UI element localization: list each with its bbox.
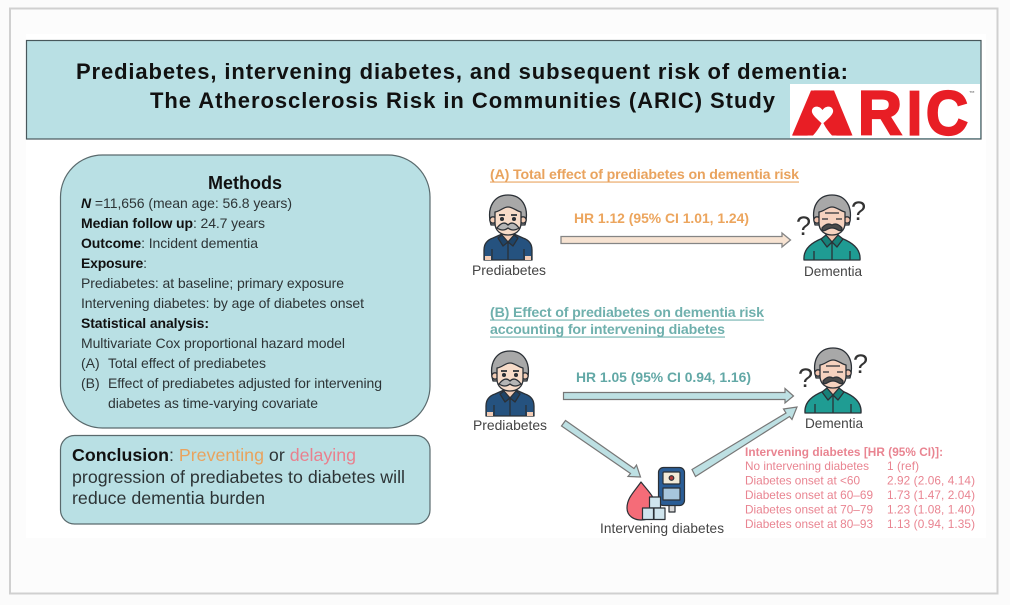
table: hazard ratios by age of diabetes onset: 1 (ref): [887, 459, 919, 473]
table: hazard ratios by age of diabetes onset: Intervening diabetes [HR (95% CI)]:: [745, 445, 943, 459]
heading: methods: Methods: [208, 173, 282, 193]
arrow: prediabetes to dementia: [564, 388, 794, 403]
text block: conclusion: progression of prediabetes to diabetes will: [72, 467, 405, 487]
text block: methods details: Outcome: Incident dementia: [81, 235, 258, 251]
question marks: [796, 196, 866, 241]
logo: ARIC: A: [793, 80, 851, 148]
text block: methods details: [81, 195, 382, 411]
question marks: ?: [853, 349, 868, 379]
title: [76, 59, 848, 113]
title: Prediabetes, intervening diabetes, and subsequent risk of dementia:: [76, 59, 848, 84]
panel: methods: [60, 155, 430, 428]
question marks: ?: [851, 196, 866, 226]
question marks: ?: [798, 363, 813, 393]
hazard ratio A: HR 1.12 (95% CI 1.01, 1.24): [574, 210, 749, 226]
table: hazard ratios by age of diabetes onset: 1.73 (1.47, 2.04): [887, 488, 975, 502]
text block: methods details: (B): [81, 375, 100, 391]
icon: man with dementia: [804, 195, 860, 260]
text block: methods details: Exposure:: [81, 255, 147, 271]
label: dementia: Dementia: [804, 264, 862, 279]
table: hazard ratios by age of diabetes onset: 1.13 (0.94, 1.35): [887, 517, 975, 531]
text block: methods details: (A): [81, 355, 100, 371]
hazard ratio B: HR 1.05 (95% CI 0.94, 1.16): [576, 369, 751, 385]
text block: conclusion: [72, 445, 405, 508]
table: hazard ratios by age of diabetes onset: Diabetes onset at <60: [745, 474, 860, 488]
text block: conclusion: reduce dementia burden: [72, 488, 265, 508]
logo: ARIC: I: [907, 80, 922, 148]
text block: methods details: diabetes as time-varying covariate: [108, 395, 318, 411]
text block: methods details: N =11,656 (mean age: 56.8 years): [81, 195, 292, 211]
icon: man with prediabetes: [486, 351, 534, 416]
table: hazard ratios by age of diabetes onset: Diabetes onset at 60–69: [745, 488, 873, 502]
heading A: (A) Total effect of prediabetes on dementia risk: [490, 167, 799, 183]
text block: methods details: Effect of prediabetes adjusted for intervening: [108, 375, 382, 391]
panel A: total effect: [472, 167, 866, 279]
label: prediabetes: Prediabetes: [473, 417, 547, 433]
table: hazard ratios by age of diabetes onset: 1.23 (1.08, 1.40): [887, 502, 975, 516]
panel B: accounting for intervening diabetes: [473, 305, 975, 536]
table: hazard ratios by age of diabetes onset: 2.92 (2.06, 4.14): [887, 474, 975, 488]
text block: methods details: Prediabetes: at baseline; primary exposure: [81, 275, 344, 291]
heading B: (B) Effect of prediabetes on dementia risk: [490, 305, 764, 321]
icon: diabetes glucose meter, blood drop and sugar cubes: [627, 468, 684, 520]
logo: ARIC: C: [926, 80, 968, 148]
arrow A: [561, 233, 790, 247]
logo: ARIC: ™: [969, 90, 975, 97]
table: hazard ratios by age of diabetes onset: [745, 445, 975, 531]
logo: ARIC: R: [858, 80, 902, 148]
text block: methods details: Intervening diabetes: by age of diabetes onset: [81, 295, 364, 311]
heading B: [490, 305, 764, 338]
question marks: ?: [796, 211, 811, 241]
text block: methods details: Multivariate Cox proportional hazard model: [81, 335, 345, 351]
text block: methods details: Statistical analysis:: [81, 315, 209, 331]
title: The Atherosclerosis Risk in Communities (ARIC) Study: [150, 88, 776, 113]
arrow: prediabetes to intervening diabetes: [562, 420, 640, 477]
text block: methods details: Total effect of prediabetes: [108, 355, 266, 371]
content area: [26, 34, 986, 538]
title banner: [26, 40, 981, 148]
icon: man with dementia: [805, 348, 861, 413]
label: intervening diabetes: Intervening diabetes: [600, 521, 724, 536]
question marks: [798, 349, 868, 393]
arrow: intervening diabetes to dementia: [692, 407, 797, 476]
label: prediabetes: Prediabetes: [472, 262, 546, 278]
table: hazard ratios by age of diabetes onset: No intervening diabetes: [745, 459, 869, 473]
icon: man with prediabetes: [484, 195, 532, 260]
heading B: accounting for intervening diabetes: [490, 322, 725, 338]
table: hazard ratios by age of diabetes onset: Diabetes onset at 70–79: [745, 502, 873, 516]
logo: ARIC: [790, 80, 980, 148]
table: hazard ratios by age of diabetes onset: Diabetes onset at 80–93: [745, 517, 873, 531]
label: dementia: Dementia: [805, 416, 863, 431]
panel: conclusion: [60, 436, 430, 524]
text block: methods details: Median follow up: 24.7 years: [81, 215, 265, 231]
text block: conclusion: Conclusion: Preventing or delaying: [72, 445, 356, 465]
